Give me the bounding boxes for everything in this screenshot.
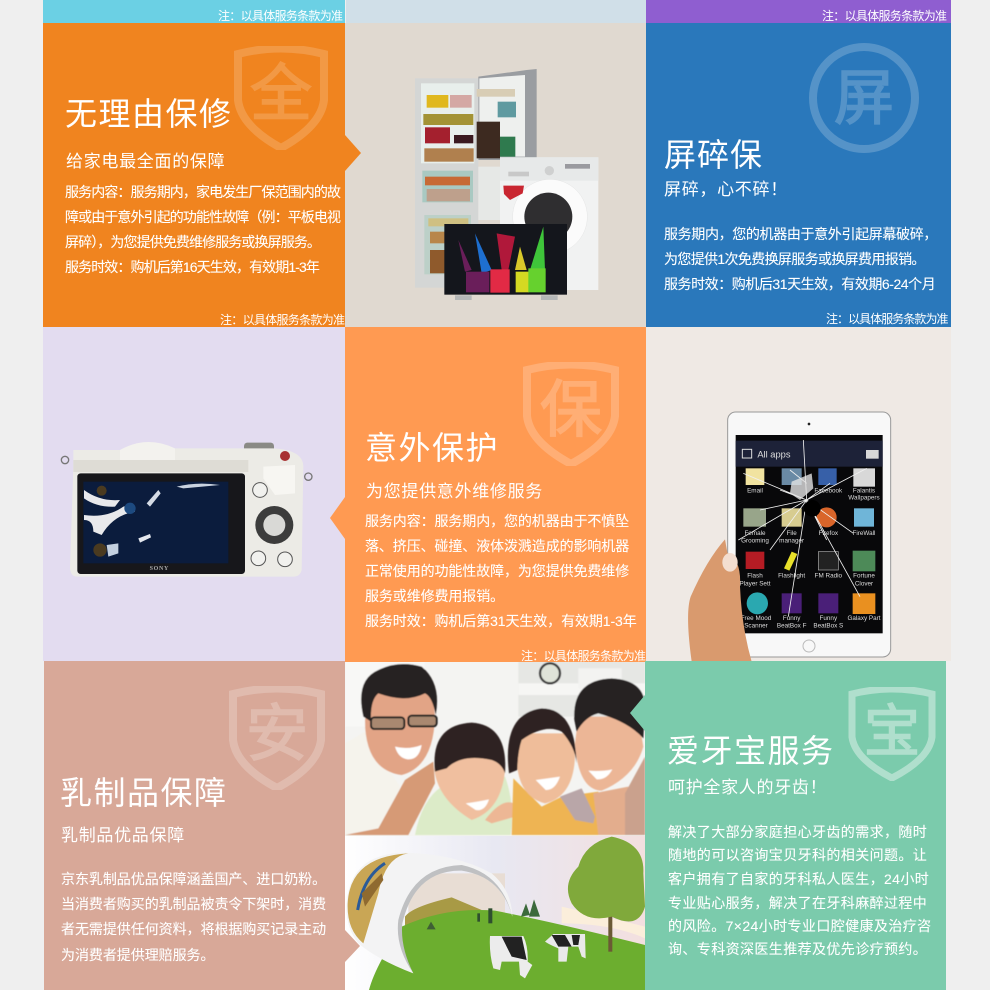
illustration: cracked tablet: All apps [757,449,791,459]
body text: 当消费者购买的乳制品被责令下架时，消费 [61,896,326,912]
panel: screen break [646,23,951,327]
note: 注：以具体服务条款为准 [218,9,342,23]
illustration: hand [688,539,752,662]
body text: 专业贴心服务，解决了在牙科麻醉过程中 [668,895,927,911]
body text: 京东乳制品优品保障涵盖国产、进口奶粉。 [61,871,326,887]
note: 注：以具体服务条款为准 [822,9,946,23]
subtitle: 乳制品优品保障 [61,826,185,845]
illustration: cracked tablet: manager [779,538,804,545]
icon: shield 全: 全 [250,60,312,129]
body text: 服务时效：购机后31天生效，有效期6-24个月 [664,276,935,292]
illustration: cracked tablet: Flashlight [778,573,805,580]
panel: appliance photo [345,23,646,327]
panel: camera photo [43,327,345,661]
illustration: cracked tablet: Funny [783,615,801,622]
illustration: cracked tablet [728,412,891,657]
illustration: camera [61,442,312,577]
illustration: cracked tablet: Galaxy Part [847,615,881,622]
body text [365,513,637,629]
body text: 客户拥有了自家的牙科私人医生，24小时 [668,871,929,887]
body text: 为您提供1次免费换屏服务或换屏费用报销。 [664,251,925,267]
illustration: fridge [415,69,537,288]
illustration: cracked tablet: Fortune [853,573,875,580]
illustration: cracked tablet: Scanner [744,622,768,629]
illustration: cracked tablet: Wallpapers [848,494,880,501]
panel: top purple strip [646,0,951,23]
body text: 服务时效：购机后第31天生效，有效期1-3年 [365,613,637,629]
body text: 者无需提供任何资料，将根据购买记录主动 [61,921,326,937]
illustration: cracked tablet: File [787,530,797,537]
body text [65,184,341,275]
illustration: cracked tablet: FireWall [853,530,875,537]
body text: 服务内容：服务期内，家电发生厂保范围内的故 [65,184,340,200]
title: 乳制品保障 [60,775,228,811]
title: 无理由保修 [65,96,233,132]
body text: 解决了大部分家庭担心牙齿的需求，随时 [668,824,927,840]
body text: 屏碎），为您提供免费维修服务或换屏服务。 [65,234,320,250]
icon: shield 保: 保 [540,376,602,445]
illustration: cracked tablet: FM Radio [815,573,843,580]
illustration: family [345,660,645,835]
illustration: milk can [346,853,512,973]
illustration: cracked tablet: Free Mood [741,615,772,622]
icon: shield 全 [234,46,328,150]
subtitle: 为您提供意外维修服务 [366,482,543,501]
icon: shield 宝: 宝 [864,700,920,763]
body text: 障或由于意外引起的功能性故障（例：平板电视 [65,209,340,225]
body text: 服务时效：购机后第16天生效，有效期1-3年 [65,259,319,275]
body text [668,824,932,957]
illustration: trees [427,837,645,952]
illustration: cracked tablet: Email [747,488,763,495]
note: 注：以具体服务条款为准 [521,649,645,663]
panel: top cyan strip [43,0,345,23]
icon: shield 安 [229,686,325,790]
body text: 服务或维修费用报销。 [365,588,504,604]
illustration: cows [490,934,586,978]
illustration: camera: SONY [150,566,169,572]
arrow: orange right [345,135,361,171]
note: 注：以具体服务条款为准 [220,313,344,327]
illustration: cracked tablet: BeatBox S [813,622,843,629]
title: 意外保护 [365,430,499,466]
body text [664,226,937,292]
illustration: cracked tablet: Firefox [819,530,839,537]
body text: 为消费者提供理赔服务。 [61,947,214,963]
body text: 随地的可以咨询宝贝牙科的相关问题。让 [668,847,927,863]
illustration: cracked tablet: Grooming [741,538,769,545]
icon: circle 屏: 屏 [834,65,894,132]
illustration: cracked tablet: Facebook [814,488,843,495]
panel: accident protection [345,327,646,662]
panel: dental service: 询、专科资深医生推荐及优先诊疗预约。 [668,941,927,957]
body text: 落、挤压、碰撞、液体泼溅造成的影响机器 [365,538,629,554]
illustration: cracked tablet: Female [744,530,766,537]
illustration: cracked tablet: Clover [855,580,873,587]
panel: dental service [645,661,946,990]
subtitle: 给家电最全面的保障 [66,152,225,171]
illustration: cracked tablet: Flash [747,573,763,580]
illustration: cracked tablet: Player Sett [740,580,771,587]
panel: family photo [345,662,645,836]
title: 屏碎保 [664,137,763,173]
icon: circle 屏 [809,43,919,153]
arrow: orange left [330,497,345,539]
panel: top pale strip [346,0,646,23]
subtitle: 呵护全家人的牙齿！ [668,778,827,797]
arrow: pink right [345,930,360,962]
body text: 服务期内，您的机器由于意外引起屏幕破碎， [664,226,937,242]
panel: milk photo [345,836,645,990]
icon: shield 安: 安 [246,700,308,769]
panel: dairy protection [44,661,345,990]
panel: no-reason repair [43,23,345,327]
illustration: washing machine [500,157,598,290]
illustration: milk sky and hill [345,836,645,990]
body text: 服务内容：服务期内，您的机器由于不慎坠 [365,513,629,529]
body text: 正常使用的功能性故障，为您提供免费维修 [365,563,629,579]
illustration: cracked tablet: Funny [820,615,838,622]
body text: 的风险。7×24小时专业口腔健康及治疗咨 [668,918,932,934]
arrow: green left [630,695,645,731]
arrow: blue down [782,327,820,343]
illustration: cracked tablet: BeatBox F [777,622,807,629]
panel: tablet photo [646,327,951,661]
title: 爱牙宝服务 [667,733,835,769]
note: 注：以具体服务条款为准 [826,312,948,326]
icon: shield 保 [523,362,619,466]
subtitle: 屏碎，心不碎！ [664,180,788,199]
illustration: cracked tablet: Falantis [853,488,875,495]
illustration: television [444,224,567,300]
icon: shield 宝 [848,687,936,781]
body text [61,871,326,963]
